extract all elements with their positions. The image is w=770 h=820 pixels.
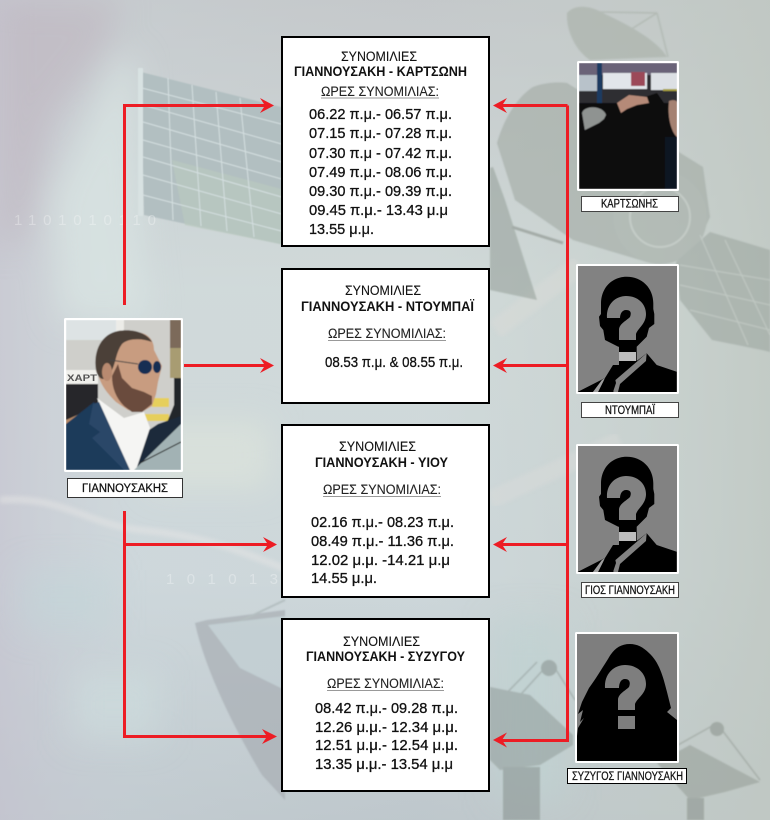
panel: calls with Kartsonis: 13.55 μ.μ. <box>309 221 374 238</box>
right connector: trunk and four arrows <box>493 98 568 748</box>
panel: calls with son: ΩΡΕΣ ΣΥΝΟΜΙΛΙΑΣ: <box>323 482 441 497</box>
silhouette: son <box>576 444 679 574</box>
silhouette: Ntoumpai <box>576 264 679 394</box>
panel: calls with Kartsonis: 07.30 π.μ - 07.42 π.μ. <box>309 145 452 162</box>
panel: calls with Ntoumpai: ΩΡΕΣ ΣΥΝΟΜΙΛΙΑΣ: <box>328 326 446 341</box>
sunglasses <box>110 360 138 364</box>
faint binary digits: 1101010110 <box>14 212 156 229</box>
shirt <box>97 398 150 470</box>
panel: calls with son: 02.16 π.μ.- 08.23 π.μ. <box>311 514 454 531</box>
left connector: to son and wife boxes <box>124 511 277 744</box>
label: Ntoumpai: ΝΤΟΥΜΠΑΪ <box>605 405 656 417</box>
question mark <box>605 665 646 729</box>
question mark <box>607 476 646 541</box>
panel: calls with son: ΓΙΑΝΝΟΥΣΑΚΗ - ΥΙΟΥ <box>315 455 448 470</box>
label: Ntoumpai <box>582 402 678 418</box>
panel: calls with Kartsonis: 09.45 π.μ.- 13.43 μ.μ <box>309 202 448 219</box>
panel: calls with Ntoumpai: ΣΥΝΟΜΙΛΙΕΣ <box>345 283 421 298</box>
dish left-bottom <box>195 600 285 800</box>
label: wife: ΣΥΖΥΓΟΣ ΓΙΑΝΝΟΥΣΑΚΗ <box>572 771 683 783</box>
panel: calls with son <box>282 425 489 597</box>
panel: calls with wife: 12.26 μ.μ.- 12.34 μ.μ. <box>315 719 458 736</box>
panel: calls with wife <box>282 619 489 791</box>
faint binary digits <box>14 212 278 588</box>
question mark <box>607 296 646 361</box>
panel: calls with Ntoumpai <box>282 269 489 403</box>
panel: calls with Kartsonis: ΓΙΑΝΝΟΥΣΑΚΗ - ΚΑΡΤΣΩΝΗ <box>294 64 467 79</box>
panel: calls with son: 08.49 π.μ.- 11.36 π.μ. <box>311 533 454 550</box>
panel: calls with Ntoumpai: 08.53 π.μ. & 08.55 π.μ. <box>325 354 463 371</box>
panel: calls with son: ΣΥΝΟΜΙΛΙΕΣ <box>339 439 416 454</box>
satellite right <box>490 7 770 352</box>
panel: calls with Kartsonis: 06.22 π.μ.- 06.57 π.μ. <box>309 106 452 123</box>
label: son: ΓΙΟΣ ΓΙΑΝΝΟΥΣΑΚΗ <box>585 585 675 597</box>
jacket <box>66 402 124 470</box>
solar panel left <box>138 68 285 245</box>
panel: calls with Kartsonis: ΣΥΝΟΜΙΛΙΕΣ <box>341 49 417 64</box>
label: Giannousakis <box>68 478 182 498</box>
faint binary digits: 101013 <box>166 571 278 588</box>
panel: calls with wife: ΩΡΕΣ ΣΥΝΟΜΙΛΙΑΣ: <box>327 676 444 691</box>
head <box>97 332 162 412</box>
left connector: to Ntoumpai box <box>184 358 274 373</box>
panel: calls with Kartsonis: 07.49 π.μ.- 08.06 π.μ. <box>309 164 452 181</box>
panel: calls with wife: 12.51 μ.μ.- 12.54 μ.μ. <box>315 737 458 754</box>
panel: calls with wife: ΣΥΝΟΜΙΛΙΕΣ <box>343 634 420 649</box>
label: Kartsonis <box>582 196 678 212</box>
label: son <box>582 582 678 598</box>
panel: calls with Kartsonis: ΩΡΕΣ ΣΥΝΟΜΙΛΙΑΣ: <box>321 84 439 99</box>
photo: Giannousakis: ΧΑΡΤ <box>67 373 98 383</box>
panel: calls with Kartsonis <box>282 37 489 246</box>
silhouette: wife <box>575 632 679 763</box>
panel: calls with wife: ΓΙΑΝΝΟΥΣΑΚΗ - ΣΥΖΥΓΟΥ <box>306 649 465 664</box>
panel: calls with son: 14.55 μ.μ. <box>311 570 377 587</box>
photo: Kartsonis <box>577 61 679 191</box>
panel: calls with Kartsonis: 09.30 π.μ.- 09.39 π.μ. <box>309 183 452 200</box>
folder <box>134 424 181 470</box>
panel: calls with son: 12.02 μ.μ. -14.21 μ.μ <box>311 552 450 569</box>
label: wife <box>568 768 686 784</box>
panel: calls with Kartsonis: 07.15 π.μ.- 07.28 π.μ. <box>309 125 452 142</box>
left connector: to Kartsoni box <box>124 98 274 305</box>
panel: calls with Ntoumpai: ΓΙΑΝΝΟΥΣΑΚΗ - ΝΤΟΥΜΠΑΪ <box>301 299 475 314</box>
panel: calls with wife: 08.42 π.μ.- 09.28 π.μ. <box>315 700 458 717</box>
dishes right-bottom <box>490 660 760 820</box>
label: Kartsonis: ΚΑΡΤΣΩΝΗΣ <box>601 198 658 210</box>
photo: Giannousakis <box>64 318 183 472</box>
panel: calls with wife: 13.35 μ.μ.- 13.54 μ.μ <box>315 756 453 773</box>
label: Giannousakis: ΓΙΑΝΝΟΥΣΑΚΗΣ <box>82 483 168 495</box>
